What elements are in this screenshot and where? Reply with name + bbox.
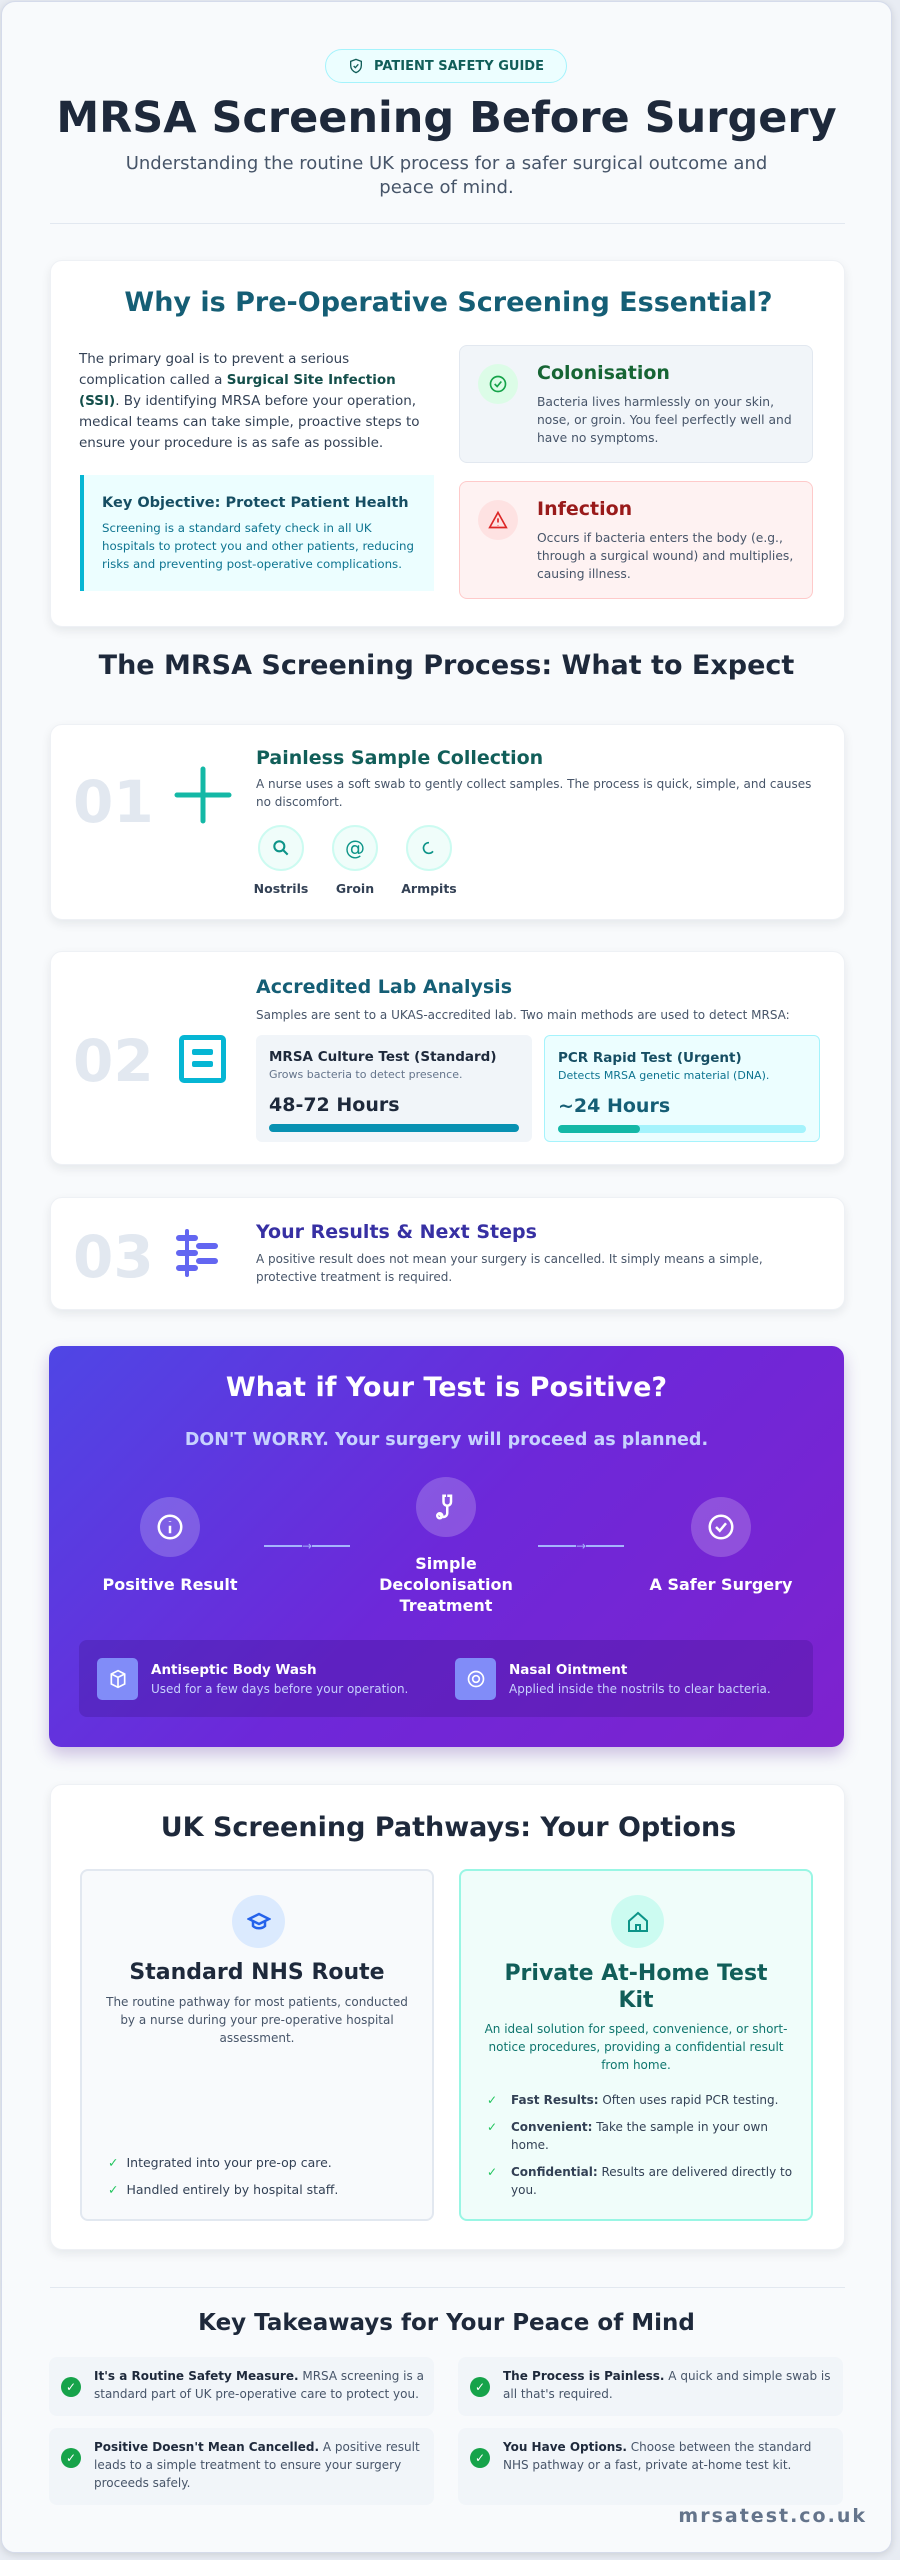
card: colonisation: Colonisation — [537, 362, 670, 384]
list: nhs benefits: ✓ Integrated into your pre-op care. — [108, 2155, 332, 2170]
icon: graduation cap — [232, 1895, 285, 1948]
footer: website: mrsatest.co.uk — [678, 2505, 867, 2527]
card: infection: Occurs if bacteria enters the body (e.g., through a surgical wound) and multiplies, causing illness. — [537, 531, 793, 581]
icon: document — [179, 1035, 226, 1083]
panel: what if positive: A Safer Surgery — [650, 1575, 792, 1594]
card: private kit: Convenient: Take the sample in your own home. — [511, 2120, 768, 2152]
takeaway 2: ✓ — [475, 2380, 485, 2394]
card: culture test: 48-72 Hours — [269, 1094, 400, 1116]
panel: step 02: 02 — [73, 1027, 154, 1095]
card: pcr test: PCR Rapid Test (Urgent) — [558, 1050, 742, 1066]
takeaway 4: You Have Options. Choose between the standard NHS pathway or a fast, private at-home test kit. — [503, 2440, 811, 2472]
panel: step 01: 01 — [73, 768, 154, 836]
arrow: → — [302, 1539, 312, 1553]
panel: step 03: A positive result does not mean your surgery is cancelled. It simply means a simple, protective treatment is required. — [256, 1252, 763, 1284]
takeaway 3 — [49, 2428, 434, 2505]
icon: armpits — [406, 825, 452, 871]
heading: screening process: The MRSA Screening Process: What to Expect — [99, 650, 794, 681]
panel: step 01: Groin — [336, 881, 374, 896]
card: private kit: An ideal solution for speed, convenience, or short-notice procedures, providing a confidential result from home. — [485, 2022, 787, 2072]
panel: step 03 — [50, 1197, 845, 1310]
icon: groin — [332, 825, 378, 871]
item: nasal ointment — [455, 1658, 496, 1700]
card: private kit — [459, 1869, 813, 2221]
badge: patient safety guide: PATIENT SAFETY GUIDE — [374, 58, 544, 74]
card: infection: Infection — [537, 498, 632, 520]
arrow: → — [576, 1539, 586, 1553]
card: culture test — [256, 1035, 532, 1142]
item: body wash — [97, 1658, 138, 1700]
takeaway 4: ✓ — [475, 2451, 485, 2465]
takeaway 4 — [458, 2428, 843, 2505]
icon: stethoscope — [416, 1477, 476, 1537]
card: culture test: MRSA Culture Test (Standard) — [269, 1049, 497, 1065]
panel: treatments: Antiseptic Body Wash — [151, 1662, 317, 1678]
icon: groin: @ — [345, 836, 365, 860]
icon: warning — [478, 500, 518, 540]
subheading: don't worry: DON'T WORRY. Your surgery will proceed as planned. — [185, 1430, 708, 1450]
card: NHS route: Standard NHS Route — [129, 1960, 385, 1985]
panel: what if positive: Positive Result — [103, 1575, 237, 1594]
list: private benefits: Fast Results: Often uses rapid PCR testing. — [511, 2093, 778, 2107]
takeaway 1 — [49, 2357, 434, 2416]
panel: step 01: Painless Sample Collection — [256, 747, 543, 769]
callout: key objective: Screening is a standard safety check in all UK hospitals to protect you and other patients, reducing risks and preventing post-operative complications. — [102, 521, 414, 571]
heading: why: Why is Pre-Operative Screening Essential? — [124, 287, 773, 318]
panel: step 02: Accredited Lab Analysis — [256, 976, 512, 998]
heading: positive: What if Your Test is Positive? — [226, 1372, 667, 1403]
card: pcr test: ~24 Hours — [558, 1095, 670, 1117]
callout: key objective: Key Objective: Protect Patient Health — [102, 495, 409, 511]
badge: patient safety guide — [325, 49, 567, 83]
panel: step 01: Nostrils — [254, 881, 308, 896]
takeaway 1: It's a Routine Safety Measure. MRSA screening is a standard part of UK pre-operative care to protect you. — [94, 2369, 424, 2401]
panel: treatments: Used for a few days before your operation. — [151, 1682, 408, 1696]
icon: nostrils — [258, 825, 304, 871]
subtitle: Understanding the routine UK process for a safer surgical outcome and peace of mind. — [126, 153, 767, 198]
panel: what if positive — [49, 1346, 844, 1747]
takeaway 3: ✓ — [66, 2451, 76, 2465]
card: infection — [459, 481, 813, 599]
icon: list — [176, 1229, 218, 1277]
card: pcr test — [544, 1035, 820, 1142]
card: private kit: Private At-Home Test — [504, 1961, 768, 1986]
panel: treatments — [79, 1640, 813, 1717]
panel: step 01 — [50, 724, 845, 920]
heading: key takeaways: Key Takeaways for Your Peace of Mind — [198, 2310, 695, 2336]
card: pcr test: Detects MRSA genetic material (DNA). — [558, 1069, 769, 1082]
title: MRSA Screening Before Surgery — [56, 93, 837, 143]
panel: treatments: Applied inside the nostrils to clear bacteria. — [509, 1682, 771, 1696]
card: NHS route — [80, 1869, 434, 2221]
card: NHS route: ✓ Handled entirely by hospital staff. — [108, 2182, 338, 2197]
icon: home — [611, 1895, 664, 1948]
panel: why screening essential — [50, 260, 845, 627]
takeaway 2: The Process is Painless. A quick and simple swab is all that's required. — [503, 2369, 830, 2401]
panel: step 03: 03 — [73, 1223, 154, 1291]
card: NHS route: The routine pathway for most patients, conducted by a nurse during your pre-operative hospital assessment. — [106, 1995, 408, 2045]
panel: step 02 — [50, 951, 845, 1165]
card: colonisation: Bacteria lives harmlessly on your skin, nose, or groin. You feel perfectly well and have no symptoms. — [537, 395, 792, 445]
panel: pathways — [50, 1784, 845, 2250]
card: private kit: Confidential: Results are delivered directly to you. — [511, 2165, 792, 2197]
card: private kit: ✓ — [487, 2120, 497, 2134]
panel: step 02: Samples are sent to a UKAS-accredited lab. Two main methods are used to detect MRSA: — [256, 1008, 790, 1022]
icon: check circle — [691, 1497, 751, 1557]
takeaway 3: Positive Doesn't Mean Cancelled. A positive result leads to a simple treatment to ensure your surgery proceeds safely. — [94, 2440, 420, 2490]
card: colonisation — [459, 345, 813, 463]
panel: step 01: A nurse uses a soft swab to gently collect samples. The process is quick, simple, and causes no discomfort. — [256, 777, 811, 809]
list: private benefits: ✓ — [487, 2093, 497, 2107]
icon: check — [478, 364, 518, 404]
takeaway 1: ✓ — [66, 2380, 76, 2394]
text block: primary goal: The primary goal is to prevent a serious complication called a Surgical Site Infection (SSI). By identifying MRSA before your operation, medical teams can take simple, proactive steps to ensure your procedure is as safe as possible. — [79, 351, 420, 451]
panel: step 01: Armpits — [401, 881, 457, 896]
takeaway 2 — [458, 2357, 843, 2416]
callout: key objective — [80, 475, 434, 591]
icon: plus — [174, 766, 232, 824]
icon: info — [140, 1497, 200, 1557]
card: private kit: Kit — [618, 1988, 654, 2013]
card: culture test: Grows bacteria to detect presence. — [269, 1068, 462, 1081]
panel: what if positive: Simple Decolonisation Treatment — [379, 1554, 513, 1615]
card: private kit: ✓ — [487, 2165, 497, 2179]
panel: treatments: Nasal Ointment — [509, 1662, 627, 1678]
panel: step 03: Your Results & Next Steps — [256, 1221, 537, 1243]
heading: pathways: UK Screening Pathways: Your Options — [161, 1812, 736, 1843]
